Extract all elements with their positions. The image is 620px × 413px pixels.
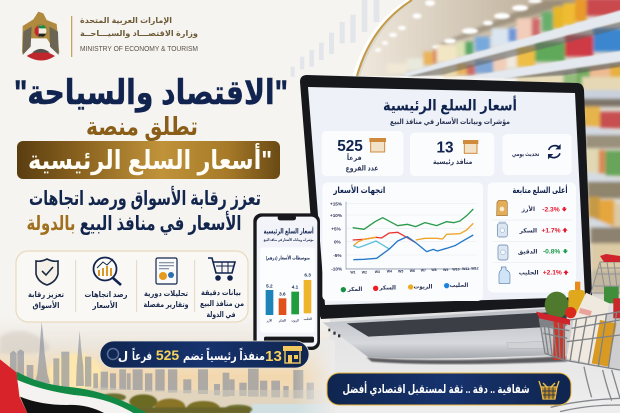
feature: periodic reports	[144, 258, 189, 309]
row: rice	[497, 200, 567, 216]
icon: store	[283, 346, 302, 363]
phone: مؤشرات وبيانات الأسعار في منافذ البيع	[264, 237, 314, 242]
line chart: W3	[375, 270, 380, 274]
laptop screen	[308, 87, 585, 305]
background: faint candlestick chart	[291, 0, 379, 77]
ministry name: الإمارات العربية المتحدة	[80, 16, 172, 25]
background: city skyline	[0, 317, 330, 413]
stat card: daily update: تحديث يومي	[512, 152, 539, 158]
pill: outlets and branches: فرعاً	[132, 347, 152, 363]
cart back and handle	[590, 262, 620, 296]
phone bar chart: الزيوت	[291, 318, 299, 322]
line chart: W12	[471, 266, 479, 270]
ministry name: MINISTRY OF ECONOMY & TOURISM	[80, 46, 198, 53]
stat card: branches: فرعاً	[346, 153, 362, 162]
line chart: 0%	[334, 240, 342, 245]
panel: most tracked commodities	[488, 182, 576, 292]
row: sugar: +1.7%	[541, 227, 561, 234]
phone bar chart: 5.2	[266, 283, 273, 288]
phone bar chart: السكر	[278, 319, 286, 323]
dashboard title: أسعار السلع الرئيسية	[383, 96, 517, 115]
description text	[27, 185, 261, 236]
phone bar chart: الأرز	[266, 319, 272, 323]
feature: monitoring trends: الأسعار	[92, 300, 118, 310]
row: milk: +2.1%	[543, 270, 562, 277]
background: floor	[300, 300, 620, 413]
feature: periodic reports: وتقارير مفصلة	[144, 300, 189, 309]
line chart: W6	[410, 269, 415, 273]
stat card: branches	[322, 131, 403, 176]
sub heading: تطلق منصة	[86, 113, 198, 142]
main heading: "الاقتصاد والسياحة"	[14, 74, 288, 113]
line chart: -5%	[333, 253, 342, 258]
line chart: W11	[462, 267, 469, 271]
icon: faint emblem	[108, 348, 118, 360]
laptop bezel	[300, 75, 592, 319]
panel: features	[16, 251, 248, 322]
dashboard subtitle: مؤشرات وبيانات الأسعار في منافذ البيع	[390, 117, 510, 126]
stat card: daily update	[503, 134, 572, 175]
cart basket wires	[539, 312, 620, 370]
line chart: W2	[362, 270, 367, 274]
chart legend: الحليب	[450, 283, 468, 289]
feature: periodic reports: تحليلات دورية	[144, 289, 188, 298]
logo: UAE emblem	[22, 12, 59, 60]
gold banner: "أسعار السلع الرئيسية	[28, 143, 272, 176]
phone bar chart	[260, 247, 315, 332]
line chart: W4	[387, 270, 392, 274]
phone bar chart: 4.1	[292, 285, 299, 290]
line chart: W8	[431, 268, 437, 272]
panel: price trends: اتجهات الأسعار	[333, 184, 385, 196]
row: sugar: السكر	[519, 227, 537, 234]
cart rim	[536, 312, 570, 325]
shelf products, top rows	[387, 0, 620, 90]
line chart: -10%	[331, 266, 343, 271]
laptop base	[323, 307, 567, 364]
feature: market oversight: الأسواق	[32, 300, 60, 310]
row: sugar	[497, 222, 568, 237]
feature: monitoring trends: رصد اتجاهات	[84, 290, 128, 299]
line chart: W5	[398, 269, 403, 273]
line chart: +5%	[331, 226, 342, 231]
feature: accurate data	[200, 258, 244, 319]
palm trees	[101, 393, 252, 413]
phone bar chart: الحليب	[304, 317, 312, 321]
panel: price trends	[322, 182, 483, 301]
phone bar chart: متوسطات الأسعار (درهم)	[266, 254, 310, 261]
row: milk: الحليب	[519, 270, 539, 277]
icon: basket	[539, 381, 559, 399]
shelf edges	[403, 7, 620, 79]
line chart: W7	[421, 269, 426, 273]
row: rice: الأرز	[521, 205, 535, 213]
bottom banner	[327, 373, 571, 405]
phone bar chart: 6.3	[304, 273, 311, 278]
panel: most tracked commodities: أعلى السلع متابعة	[512, 184, 568, 196]
feature: accurate data: بيانات دقيقة	[201, 288, 241, 297]
stat card: outlets: 13	[436, 140, 454, 157]
logo divider	[71, 16, 72, 57]
gold banner	[17, 141, 280, 179]
cart legs	[551, 367, 620, 412]
stat card: outlets	[410, 133, 494, 176]
ministry name	[80, 16, 198, 53]
phone	[253, 213, 320, 350]
chart legend: المكر	[347, 286, 362, 293]
chart legend	[341, 283, 468, 293]
UAE flag	[0, 359, 147, 413]
pill: outlets and branches: 13	[265, 348, 282, 365]
feature: market oversight	[28, 259, 64, 310]
row: flour: الدقيق	[518, 248, 537, 255]
stat card: branches: عدد الفروع	[346, 164, 378, 173]
phone bar chart: 3.6	[279, 291, 286, 296]
feature: monitoring trends	[84, 258, 128, 310]
pill: outlets and branches: منفذاً رئيسياً تضم	[183, 347, 265, 363]
cart groceries	[539, 282, 620, 370]
line chart: W9	[443, 268, 448, 272]
phone title: أسعار السلع الرئيسية	[264, 226, 314, 235]
pill: outlets and branches: ل	[118, 349, 128, 363]
line chart: +10%	[330, 213, 343, 218]
background: supermarket aisle	[354, 0, 620, 300]
line chart: +15%	[330, 201, 343, 206]
row: milk	[499, 267, 569, 284]
shopping cart	[536, 254, 620, 412]
row: flour: -0.8%	[543, 248, 560, 255]
dashboard	[322, 96, 572, 176]
ceiling lights	[375, 0, 542, 52]
gold arc	[354, 0, 409, 76]
chart legend: الزيوت	[414, 284, 433, 290]
bottom banner: شفافية .. دقة .. ثقة لمستقبل اقتصادي أفضل	[342, 381, 530, 396]
row: rice: -2.3%	[542, 207, 560, 214]
chart legend: السكر	[378, 285, 396, 292]
feature: market oversight: تعزيز رقابة	[28, 290, 64, 299]
row: flour	[498, 245, 568, 260]
line chart	[330, 201, 479, 275]
shelf products, right column	[582, 77, 620, 293]
line chart: W1	[350, 271, 356, 275]
feature: accurate data: من منافذ البيع	[200, 299, 244, 308]
stat card: outlets: منافذ رئيسية	[433, 159, 472, 166]
pill: outlets and branches	[100, 341, 309, 368]
line chart: W10	[452, 268, 460, 272]
feature: accurate data: في الدولة	[206, 310, 236, 319]
laptop	[300, 75, 592, 364]
stat card: branches: 525	[337, 138, 363, 155]
description text: الأسعار في منافذ البيع بالدولة	[27, 210, 242, 236]
pill: outlets and branches: 525	[156, 347, 179, 363]
ministry name: وزارة الاقتصـــاد والسيـــاحــة	[80, 29, 198, 38]
description text: تعزز رقابة الأسواق ورصد اتجاهات	[29, 185, 261, 210]
